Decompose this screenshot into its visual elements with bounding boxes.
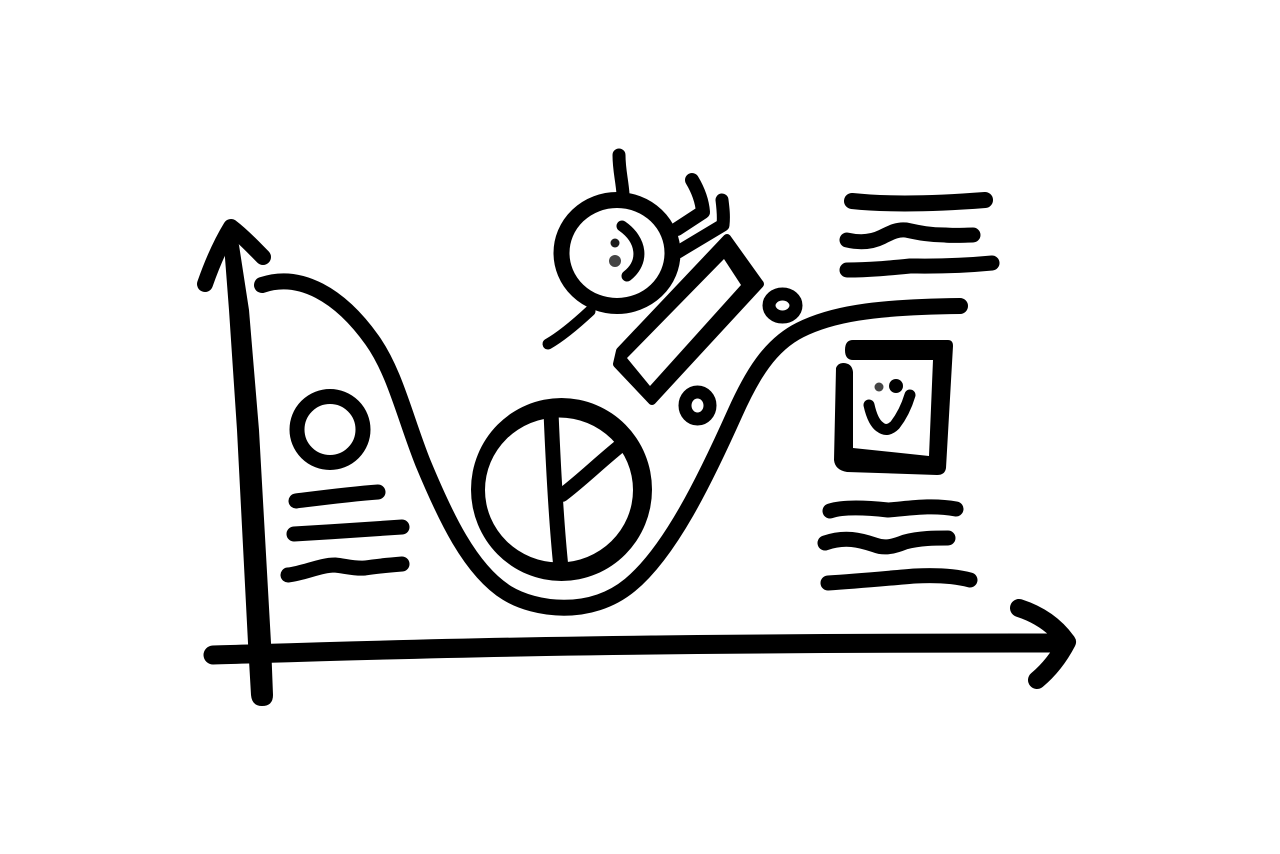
legs <box>677 180 703 229</box>
smile <box>622 226 639 276</box>
pie chart icon <box>471 398 652 581</box>
y axis arrow <box>205 222 273 706</box>
head <box>562 200 672 306</box>
bottom right text lines <box>825 507 970 583</box>
arm <box>548 311 590 344</box>
curve line <box>262 281 960 608</box>
cart board <box>617 238 760 401</box>
left circle icon <box>297 396 363 462</box>
x axis arrow <box>213 608 1067 680</box>
cart wheels <box>685 294 796 419</box>
framed smiley icon <box>834 340 953 475</box>
eyes <box>610 238 620 248</box>
top right text lines <box>847 200 992 270</box>
left text lines <box>288 492 402 575</box>
hair stroke <box>619 155 623 194</box>
person on cart <box>548 155 723 344</box>
